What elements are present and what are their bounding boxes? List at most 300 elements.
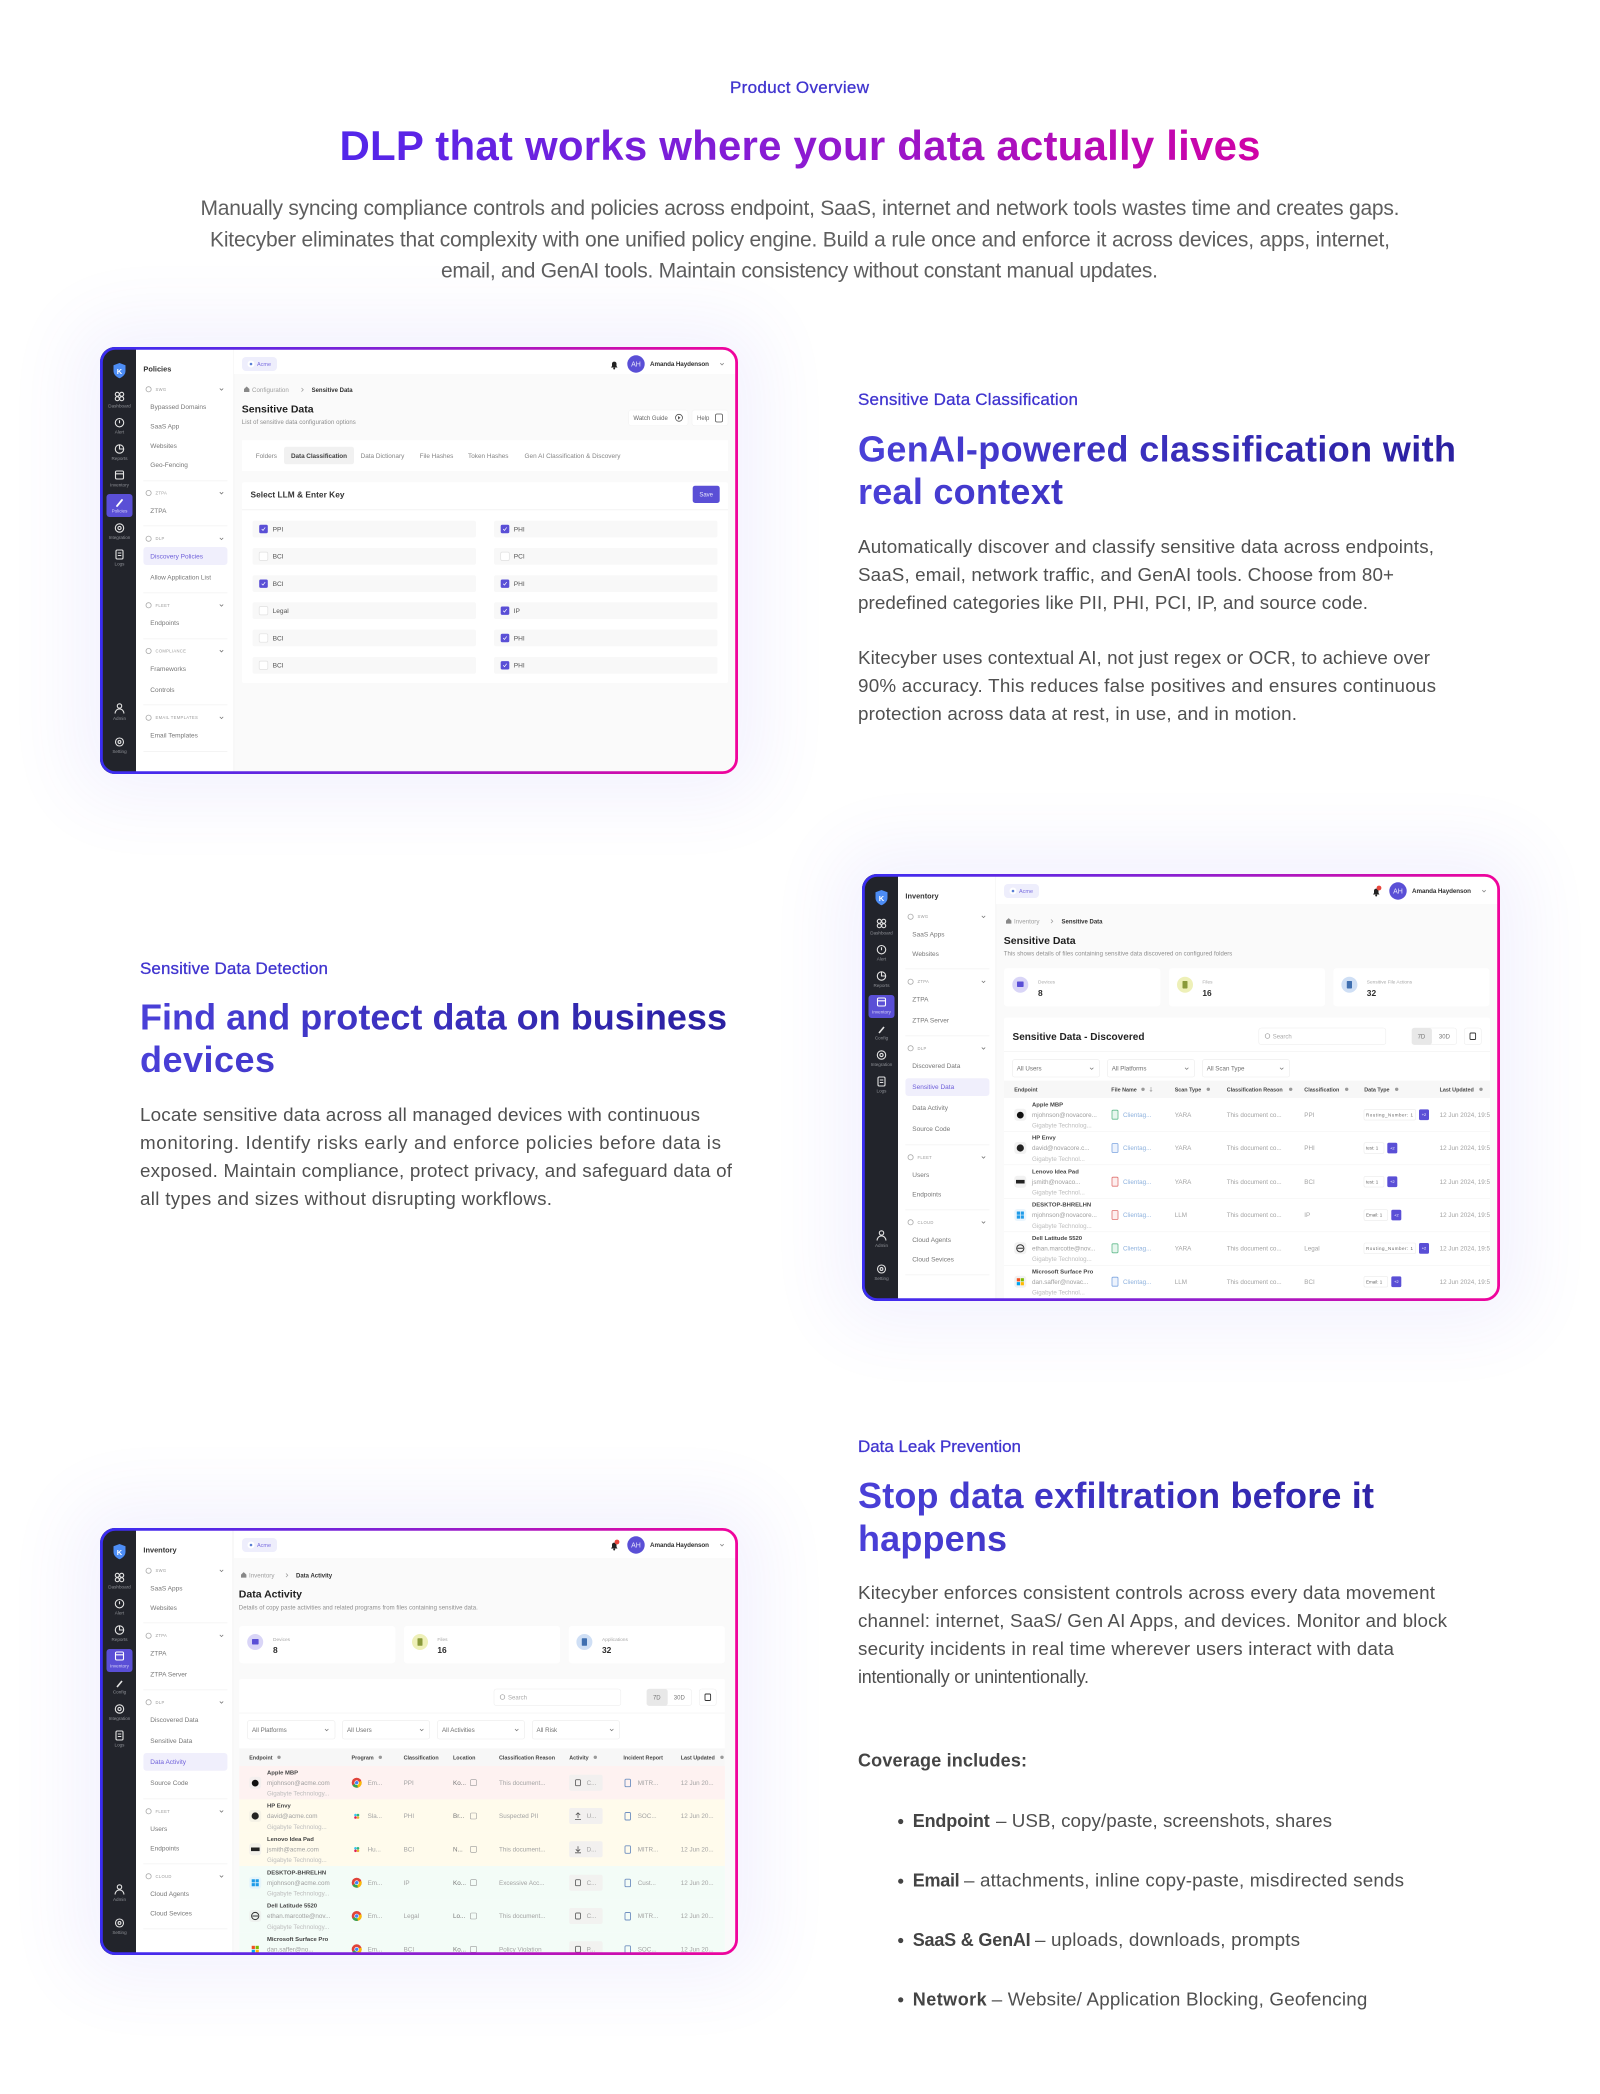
- body text: detection: [140, 1104, 733, 1209]
- dark icon rail: [100, 1528, 136, 1955]
- table: data activity: Endpoint: [249, 1755, 273, 1761]
- table row: microsoft surface pro, low risk: Microsoft Surface Pro: [267, 1937, 329, 1943]
- top bar: Acme: [1019, 889, 1033, 895]
- table row: apple mbp: Apple MBP: [1032, 1102, 1063, 1108]
- table row: dell latitude, low risk: Em...: [368, 1913, 383, 1920]
- table row: hp envy, medium risk: david@acme.com: [267, 1813, 318, 1820]
- table row: microsoft surface pro, low risk: SOC...: [638, 1946, 657, 1953]
- dark icon rail: Alert: [877, 956, 887, 962]
- table row: dell latitude: Routing_Number: 1: [1366, 1246, 1413, 1251]
- table row: microsoft surface pro, low risk: dan.saffer@no...: [267, 1946, 314, 1953]
- table row: dell latitude, low risk: This document...: [499, 1913, 546, 1920]
- table: sensitive data discovered: Classification: [1304, 1087, 1339, 1093]
- secondary navigation: policies: Websites: [150, 443, 178, 450]
- table row: lenovo idea pad: 12 Jun 2024, 19:5: [1440, 1179, 1491, 1186]
- dark icon rail: Admin: [875, 1243, 888, 1248]
- table row: desktop-bhrelhn: [1014, 1203, 1491, 1230]
- stat cards: Sensitive File Actions: [1367, 980, 1413, 986]
- list item: endpoint: Endpoint: [913, 1811, 990, 1831]
- table row: hp envy, medium risk: HP Envy: [267, 1804, 292, 1810]
- card: select LLM and enter key: Select LLM & Enter Key: [250, 489, 345, 499]
- heading: stop data exfiltration: happens: [858, 1518, 1007, 1558]
- card: select LLM and enter key: PPI: [273, 526, 283, 533]
- dark icon rail: Dashboard: [108, 1584, 131, 1590]
- top bar: Acme: [257, 1543, 271, 1549]
- secondary navigation: inventory: CLOUD: [156, 1874, 172, 1879]
- tab bar: Gen AI Classification & Discovery: [524, 453, 621, 460]
- top bar: [996, 877, 1486, 904]
- secondary navigation: inventory: SaaS Apps: [150, 1586, 183, 1592]
- body text: detection: all types and sizes without disrupting workflows.: [140, 1188, 552, 1209]
- table row: hp envy, medium risk: 12 Jun 20...: [681, 1813, 714, 1820]
- table row: lenovo idea pad, medium risk: [239, 1833, 725, 1866]
- dark icon rail: Dashboard: [870, 930, 893, 936]
- table row: dell latitude: +2: [1422, 1246, 1427, 1251]
- tab bar: File Hashes: [420, 453, 453, 460]
- secondary navigation: policies: Email Templates: [150, 732, 199, 740]
- table row: desktop-bhrelhn, low risk: mjohnson@acme.com: [267, 1880, 330, 1887]
- dark icon rail: Inventory: [872, 1010, 892, 1014]
- secondary navigation: inventory: Source Code: [912, 1126, 951, 1133]
- panel: sensitive data discovered screenshot: [862, 874, 1500, 1301]
- top bar: Amanda Haydenson: [650, 361, 709, 368]
- table row: lenovo idea pad, medium risk: 12 Jun 20...: [681, 1846, 714, 1853]
- table row: microsoft surface pro, low risk: BCI: [404, 1946, 414, 1953]
- table row: lenovo idea pad, medium risk: N...: [453, 1846, 463, 1853]
- dark icon rail: Admin: [113, 716, 126, 721]
- table row: apple mbp, high risk: Ko...: [453, 1780, 466, 1787]
- dark icon rail: [100, 347, 136, 774]
- table row: apple mbp: This document co...: [1227, 1112, 1282, 1119]
- breadcrumb: Inventory: [249, 1572, 275, 1580]
- table: data activity: 30D: [674, 1696, 685, 1702]
- top bar: Amanda Haydenson: [1412, 888, 1471, 895]
- secondary navigation: policies: SaaS App: [150, 424, 180, 430]
- table row: dell latitude, low risk: Lo...: [453, 1913, 466, 1920]
- tab bar: Folders: [256, 453, 277, 460]
- table row: desktop-bhrelhn: +2: [1394, 1212, 1399, 1217]
- secondary navigation: policies: Allow Application List: [150, 574, 211, 582]
- table row: apple mbp, high risk: 12 Jun 20...: [681, 1780, 714, 1787]
- stat cards: 32: [602, 1645, 612, 1655]
- table row: desktop-bhrelhn, low risk: Gigabyte Technology...: [267, 1891, 330, 1898]
- table row: hp envy: test: 1: [1366, 1146, 1379, 1151]
- table row: apple mbp: Clientag...: [1123, 1112, 1152, 1119]
- table row: lenovo idea pad, medium risk: D...: [587, 1846, 597, 1853]
- secondary navigation: inventory: Cloud Sevices: [912, 1256, 955, 1264]
- top bar: Acme: [257, 362, 271, 368]
- secondary navigation: inventory: [136, 1528, 233, 1955]
- heading: genai-powered classification: real context: [858, 471, 1063, 512]
- table row: apple mbp: YARA: [1175, 1112, 1192, 1119]
- dark icon rail: K: [879, 894, 885, 903]
- table row: desktop-bhrelhn, low risk: 12 Jun 20...: [681, 1880, 714, 1887]
- table row: microsoft surface pro, low risk: [240, 1933, 725, 1952]
- dark icon rail: Inventory: [110, 482, 130, 488]
- secondary navigation: policies: Policies: [143, 364, 171, 374]
- list item: email: – attachments, inline copy-paste, misdirected sends: [964, 1870, 1404, 1891]
- table row: dell latitude, low risk: C...: [587, 1913, 597, 1920]
- table row: microsoft surface pro: dan.saffer@novac...: [1032, 1279, 1089, 1286]
- secondary navigation: inventory: ZTPA: [156, 1633, 167, 1638]
- table row: desktop-bhrelhn: Email: 1: [1366, 1213, 1383, 1218]
- table row: microsoft surface pro: +2: [1394, 1279, 1399, 1284]
- secondary navigation: inventory: FLEET: [918, 1155, 932, 1160]
- eyebrow: data leak prevention: Data Leak Prevention: [858, 1437, 1021, 1456]
- body text: classification: 90% accuracy. This reduces false positives and ensures continuous: [858, 674, 1436, 696]
- table: data activity: Classification Reason: [499, 1755, 555, 1761]
- list item: saas and genai: [898, 1929, 1300, 1950]
- card: select LLM and enter key: PHI: [514, 663, 525, 670]
- table row: apple mbp: 12 Jun 2024, 19:5: [1440, 1112, 1491, 1119]
- table row: dell latitude: Gigabyte Technolog...: [1032, 1256, 1092, 1263]
- secondary navigation: policies: Controls: [150, 687, 175, 694]
- secondary navigation: inventory: Sensitive Data: [912, 1084, 955, 1091]
- table: data activity: All Users: [347, 1727, 372, 1734]
- table row: dell latitude, low risk: ethan.marcotte@nov...: [267, 1913, 331, 1920]
- body text: detection: Locate sensitive data across all managed devices with continuous: [140, 1104, 700, 1125]
- dark icon rail: Integration: [871, 1062, 893, 1067]
- secondary navigation: inventory: Websites: [912, 951, 940, 958]
- table row: hp envy, medium risk: [239, 1799, 725, 1833]
- body text: classification: [858, 536, 1436, 724]
- table: sensitive data discovered: Scan Type: [1175, 1087, 1201, 1093]
- table row: microsoft surface pro: Email: 1: [1366, 1279, 1383, 1284]
- table row: desktop-bhrelhn, low risk: C...: [587, 1880, 597, 1887]
- secondary navigation: policies: Bypassed Domains: [150, 404, 207, 411]
- dark icon rail: Integration: [109, 535, 131, 540]
- table row: dell latitude: Clientag...: [1123, 1245, 1152, 1252]
- page heading: [1004, 935, 1232, 958]
- table row: desktop-bhrelhn: Clientag...: [1123, 1212, 1152, 1219]
- dark icon rail: Inventory: [110, 1664, 130, 1668]
- body text: classification: protection across data at rest, in use, and in motion.: [858, 702, 1297, 724]
- secondary navigation: inventory: SWG: [918, 914, 928, 919]
- table row: lenovo idea pad: YARA: [1175, 1179, 1192, 1186]
- table: sensitive data discovered: Endpoint: [1014, 1087, 1038, 1093]
- secondary navigation: policies: Endpoints: [150, 620, 180, 627]
- card: select LLM and enter key: BCI: [273, 581, 284, 588]
- body text: data leak prevention: channel: internet, SaaS/ Gen AI Apps, and devices. Monitor and block: [858, 1610, 1448, 1631]
- list item: saas and genai: SaaS & GenAI: [913, 1930, 1031, 1950]
- table row: dell latitude: ethan.marcotte@nov...: [1032, 1245, 1096, 1252]
- table row: dell latitude, low risk: Legal: [404, 1913, 419, 1920]
- secondary navigation: policies: SWG: [156, 387, 166, 392]
- table row: lenovo idea pad, medium risk: This document...: [499, 1846, 546, 1853]
- table row: apple mbp: Routing_Number: 1: [1366, 1112, 1413, 1117]
- card: select LLM and enter key: PCI: [514, 554, 525, 561]
- secondary navigation: inventory: DLP: [918, 1046, 927, 1051]
- body text: data leak prevention: intentionally or unintentionally.: [858, 1667, 1089, 1687]
- table row: microsoft surface pro, low risk: Em...: [368, 1946, 383, 1953]
- table row: hp envy: [1014, 1136, 1491, 1163]
- breadcrumb: [244, 386, 353, 394]
- dark icon rail: Reports: [111, 1637, 128, 1642]
- secondary navigation: inventory: [898, 874, 996, 1301]
- dark icon rail: Config: [113, 1690, 127, 1694]
- secondary navigation: inventory: SaaS Apps: [912, 932, 945, 938]
- table row: lenovo idea pad: +2: [1390, 1179, 1395, 1184]
- card: select LLM and enter key: Save: [699, 492, 714, 498]
- table: data activity: Classification: [404, 1755, 439, 1761]
- top bar: AH: [1393, 888, 1403, 896]
- intro paragraph: Kitecyber eliminates that complexity with one unified policy engine. Build a rule once and enforce it across devices, apps, internet,: [210, 229, 1390, 252]
- coverage list: [898, 1810, 1404, 2010]
- body text: detection: monitoring. Identify risks early and enforce policies before data is: [140, 1132, 721, 1153]
- table: sensitive data discovered: All Scan Type: [1207, 1066, 1245, 1072]
- breadcrumb: Sensitive Data: [312, 388, 353, 394]
- table row: microsoft surface pro: LLM: [1175, 1279, 1187, 1286]
- breadcrumb: Data Activity: [296, 1574, 333, 1580]
- list item: network: – Website/ Application Blocking, Geofencing: [992, 1988, 1367, 2009]
- secondary navigation: inventory: ZTPA Server: [150, 1672, 188, 1678]
- dark icon rail: K: [117, 1548, 123, 1557]
- table row: apple mbp, high risk: Gigabyte Technology...: [267, 1790, 330, 1797]
- secondary navigation: inventory: Endpoints: [150, 1846, 180, 1852]
- sub-heading: coverage includes: Coverage includes:: [858, 1751, 1027, 1771]
- dark icon rail: Logs: [877, 1088, 887, 1094]
- secondary navigation: policies: COMPLIANCE: [156, 648, 186, 654]
- table row: desktop-bhrelhn: 12 Jun 2024, 19:5: [1440, 1212, 1491, 1219]
- table row: hp envy, medium risk: U...: [587, 1813, 597, 1820]
- table row: desktop-bhrelhn: This document co...: [1227, 1212, 1282, 1219]
- table row: hp envy: david@novacore.c...: [1032, 1145, 1090, 1152]
- table row: desktop-bhrelhn: DESKTOP-BHRELHN: [1032, 1203, 1091, 1209]
- table row: hp envy: PHI: [1304, 1145, 1315, 1152]
- table: sensitive data discovered: Last Updated: [1440, 1087, 1474, 1093]
- table row: desktop-bhrelhn: IP: [1304, 1212, 1310, 1219]
- watch guide and help buttons: Help: [697, 416, 710, 422]
- intro paragraph: [200, 197, 1400, 282]
- table row: microsoft surface pro: Clientag...: [1123, 1279, 1152, 1286]
- stat cards: 8: [1038, 988, 1043, 998]
- card: select LLM and enter key: IP: [514, 608, 521, 615]
- page heading: Sensitive Data: [242, 404, 314, 416]
- top bar: AH: [631, 362, 641, 368]
- heading: stop data exfiltration: Stop data exfiltration before it: [858, 1474, 1374, 1516]
- secondary navigation: inventory: Users: [150, 1826, 168, 1833]
- table row: apple mbp: [1014, 1102, 1491, 1130]
- table row: desktop-bhrelhn: mjohnson@novacore...: [1032, 1212, 1097, 1219]
- stat cards: 16: [437, 1645, 447, 1655]
- dark icon rail: Reports: [111, 456, 128, 461]
- table row: lenovo idea pad: BCI: [1304, 1179, 1315, 1186]
- table row: microsoft surface pro: [1014, 1269, 1491, 1296]
- card: select LLM and enter key: BCI: [273, 554, 284, 561]
- table row: microsoft surface pro, low risk: Policy Violation: [499, 1946, 542, 1953]
- table row: microsoft surface pro: Gigabyte Technol...: [1032, 1290, 1085, 1297]
- body text: classification: SaaS, email, network traffic, and GenAI tools. Choose from 80+: [858, 564, 1394, 584]
- table row: dell latitude: YARA: [1175, 1245, 1192, 1252]
- table row: microsoft surface pro: Microsoft Surface Pro: [1032, 1269, 1094, 1275]
- table: data activity: All Platforms: [252, 1727, 287, 1734]
- table row: desktop-bhrelhn, low risk: Cust...: [638, 1880, 656, 1887]
- table row: hp envy, medium risk: PHI: [404, 1813, 414, 1820]
- table row: lenovo idea pad: Lenovo Idea Pad: [1032, 1169, 1079, 1175]
- table row: hp envy, medium risk: SOC...: [638, 1813, 657, 1820]
- table row: hp envy, medium risk: Suspected PII: [499, 1813, 538, 1820]
- secondary navigation: inventory: FLEET: [156, 1809, 170, 1814]
- secondary navigation: policies: FLEET: [156, 603, 170, 608]
- table row: dell latitude, low risk: 12 Jun 20...: [681, 1913, 714, 1920]
- breadcrumb: [241, 1572, 333, 1580]
- secondary navigation: inventory: CLOUD: [918, 1220, 934, 1225]
- dark icon rail: Reports: [873, 983, 890, 988]
- table row: apple mbp: PPI: [1304, 1112, 1315, 1119]
- breadcrumb: [1006, 918, 1103, 926]
- body text: data leak prevention: Kitecyber enforces consistent controls across every data movement: [858, 1582, 1436, 1603]
- secondary navigation: inventory: Inventory: [905, 892, 940, 900]
- table row: apple mbp, high risk: MITR...: [638, 1780, 659, 1787]
- table row: hp envy, medium risk: Sla...: [368, 1813, 382, 1820]
- heading: find and protect data: devices: [140, 1039, 275, 1080]
- stat cards: 8: [273, 1645, 278, 1655]
- table row: hp envy, medium risk: Gigabyte Technolog...: [267, 1824, 327, 1831]
- secondary navigation: inventory: Source Code: [150, 1780, 189, 1787]
- table: sensitive data discovered: Data Type: [1364, 1087, 1390, 1093]
- table row: hp envy: HP Envy: [1032, 1136, 1057, 1142]
- table row: microsoft surface pro, low risk: Ko...: [453, 1946, 466, 1953]
- list item: saas and genai: – uploads, downloads, prompts: [1035, 1929, 1300, 1950]
- secondary navigation: policies: Discovery Policies: [150, 554, 204, 560]
- body text: classification: Kitecyber uses contextual AI, not just regex or OCR, to achieve over: [858, 646, 1430, 668]
- heading: find and protect data: [140, 997, 727, 1080]
- body text: classification: predefined categories like PII, PHI, PCI, IP, and source code.: [858, 592, 1368, 612]
- heading: genai-powered classification: GenAI-powered classification with: [858, 429, 1456, 470]
- table row: dell latitude, low risk: MITR...: [638, 1913, 659, 1920]
- panel: data activity screenshot: [100, 1528, 738, 1955]
- secondary navigation: policies: [136, 347, 234, 774]
- top bar: [234, 350, 724, 374]
- table row: desktop-bhrelhn: LLM: [1175, 1212, 1187, 1219]
- table row: dell latitude, low risk: Gigabyte Technology...: [267, 1924, 330, 1931]
- dark icon rail: Logs: [115, 562, 125, 566]
- dark icon rail: Logs: [115, 1742, 125, 1748]
- secondary navigation: inventory: Sensitive Data: [150, 1738, 193, 1745]
- secondary navigation: policies: ZTPA: [156, 490, 167, 496]
- table row: microsoft surface pro: BCI: [1304, 1279, 1315, 1286]
- secondary navigation: inventory: Cloud Agents: [150, 1891, 190, 1898]
- table row: desktop-bhrelhn: Gigabyte Technolog...: [1032, 1223, 1092, 1230]
- table row: hp envy: +2: [1390, 1145, 1395, 1150]
- page heading: This shows details of files containing sensitive data discovered on configured folders: [1004, 952, 1232, 958]
- breadcrumb: Configuration: [252, 387, 289, 394]
- table row: dell latitude: This document co...: [1227, 1245, 1282, 1252]
- secondary navigation: inventory: Discovered Data: [912, 1063, 961, 1070]
- stat cards: [1012, 976, 1412, 996]
- stat cards: [247, 1634, 628, 1653]
- table row: apple mbp, high risk: [239, 1766, 725, 1799]
- table row: desktop-bhrelhn, low risk: Excessive Acc...: [499, 1880, 545, 1887]
- watch guide and help buttons: Watch Guide: [633, 416, 669, 422]
- secondary navigation: inventory: ZTPA: [912, 996, 929, 1004]
- stat cards: 32: [1367, 988, 1376, 998]
- eyebrow: product overview: Product Overview: [730, 78, 870, 97]
- tab bar: Data Dictionary: [361, 453, 405, 460]
- table: sensitive data discovered: 30D: [1439, 1034, 1451, 1040]
- secondary navigation: inventory: ZTPA: [150, 1650, 167, 1658]
- table: sensitive data discovered: Classification Reason: [1227, 1087, 1283, 1093]
- table: data activity: Incident Report: [623, 1755, 663, 1761]
- secondary navigation: policies: ZTPA: [150, 508, 167, 515]
- intro paragraph: email, and GenAI tools. Maintain consistency without constant manual updates.: [441, 259, 1158, 282]
- table row: microsoft surface pro, low risk: P...: [587, 1946, 595, 1953]
- table row: apple mbp, high risk: PPI: [404, 1780, 414, 1787]
- table row: lenovo idea pad: test: 1: [1366, 1179, 1379, 1184]
- table: sensitive data discovered: Search: [1273, 1034, 1292, 1040]
- table row: lenovo idea pad, medium risk: MITR...: [638, 1846, 659, 1853]
- dark icon rail: Dashboard: [108, 404, 131, 408]
- table row: lenovo idea pad: Gigabyte Technol...: [1032, 1190, 1085, 1197]
- table row: apple mbp: +2: [1422, 1112, 1427, 1117]
- page heading: Data Activity: [239, 1589, 302, 1601]
- secondary navigation: inventory: Users: [912, 1172, 930, 1179]
- body text: detection: exposed. Maintain compliance, protect privacy, and safeguard data of: [140, 1160, 733, 1181]
- table row: dell latitude: Dell Latitude 5520: [1032, 1236, 1083, 1242]
- table: data activity: Activity: [569, 1755, 589, 1761]
- card: select LLM and enter key: BCI: [273, 635, 284, 642]
- page heading: List of sensitive data configuration options: [242, 420, 356, 426]
- panel: policies screenshot: [100, 347, 738, 774]
- table row: lenovo idea pad: This document co...: [1227, 1179, 1282, 1186]
- dark icon rail: K: [117, 367, 123, 376]
- dark icon rail: Setting: [112, 1930, 127, 1935]
- table row: dell latitude: Legal: [1304, 1245, 1320, 1252]
- table row: lenovo idea pad, medium risk: Gigabyte Technolog...: [267, 1857, 327, 1864]
- table row: hp envy: 12 Jun 2024, 19:5: [1440, 1145, 1491, 1152]
- table row: apple mbp, high risk: C...: [587, 1780, 597, 1787]
- table row: desktop-bhrelhn, low risk: Ko...: [453, 1880, 466, 1887]
- table: sensitive data discovered: All Platforms: [1112, 1066, 1146, 1072]
- table row: apple mbp, high risk: Em...: [368, 1780, 383, 1787]
- table: data activity: Program: [352, 1755, 374, 1761]
- secondary navigation: policies: DLP: [156, 536, 165, 541]
- page heading: Sensitive Data: [1004, 935, 1076, 947]
- body text: data leak prevention: security incidents in real time wherever users interact with data: [858, 1638, 1395, 1659]
- table: data activity: All Activities: [442, 1727, 475, 1734]
- title: DLP that works where your data actually lives: [340, 122, 1260, 169]
- intro paragraph: Manually syncing compliance controls and policies across endpoint, SaaS, internet and network tools wastes time and creates gaps.: [200, 197, 1400, 220]
- dark icon rail: Setting: [874, 1276, 889, 1281]
- table row: dell latitude: [1014, 1236, 1491, 1263]
- table row: lenovo idea pad, medium risk: jsmith@acme.com: [266, 1846, 319, 1853]
- secondary navigation: inventory: Websites: [150, 1605, 178, 1612]
- secondary navigation: inventory: ZTPA: [918, 979, 929, 984]
- table row: apple mbp, high risk: Apple MBP: [267, 1770, 298, 1776]
- secondary navigation: inventory: Cloud Agents: [912, 1237, 952, 1244]
- breadcrumb: Sensitive Data: [1062, 920, 1103, 926]
- dark icon rail: [862, 874, 898, 1301]
- tab bar: Data Classification: [291, 453, 347, 460]
- eyebrow: sensitive data detection: Sensitive Data Detection: [140, 959, 328, 978]
- table: data activity: Location: [453, 1755, 475, 1761]
- table: sensitive data discovered: All Users: [1017, 1066, 1042, 1072]
- table row: dell latitude: 12 Jun 2024, 19:5: [1440, 1245, 1491, 1252]
- body text: data leak prevention: [858, 1582, 1448, 1687]
- stat cards: 16: [1202, 988, 1212, 998]
- table row: lenovo idea pad, medium risk: Hu...: [368, 1846, 381, 1853]
- dark icon rail: Alert: [115, 430, 125, 434]
- secondary navigation: inventory: Cloud Sevices: [150, 1910, 193, 1918]
- table row: hp envy: Gigabyte Technol...: [1032, 1156, 1085, 1163]
- tab bar: [256, 447, 620, 464]
- card: select LLM and enter key: PHI: [514, 635, 525, 642]
- stat cards: Applications: [602, 1637, 628, 1643]
- table row: apple mbp, high risk: mjohnson@acme.com: [267, 1780, 330, 1787]
- table: data activity: 7D: [653, 1696, 661, 1702]
- table row: lenovo idea pad: Clientag...: [1123, 1179, 1152, 1186]
- dark icon rail: Setting: [112, 749, 127, 754]
